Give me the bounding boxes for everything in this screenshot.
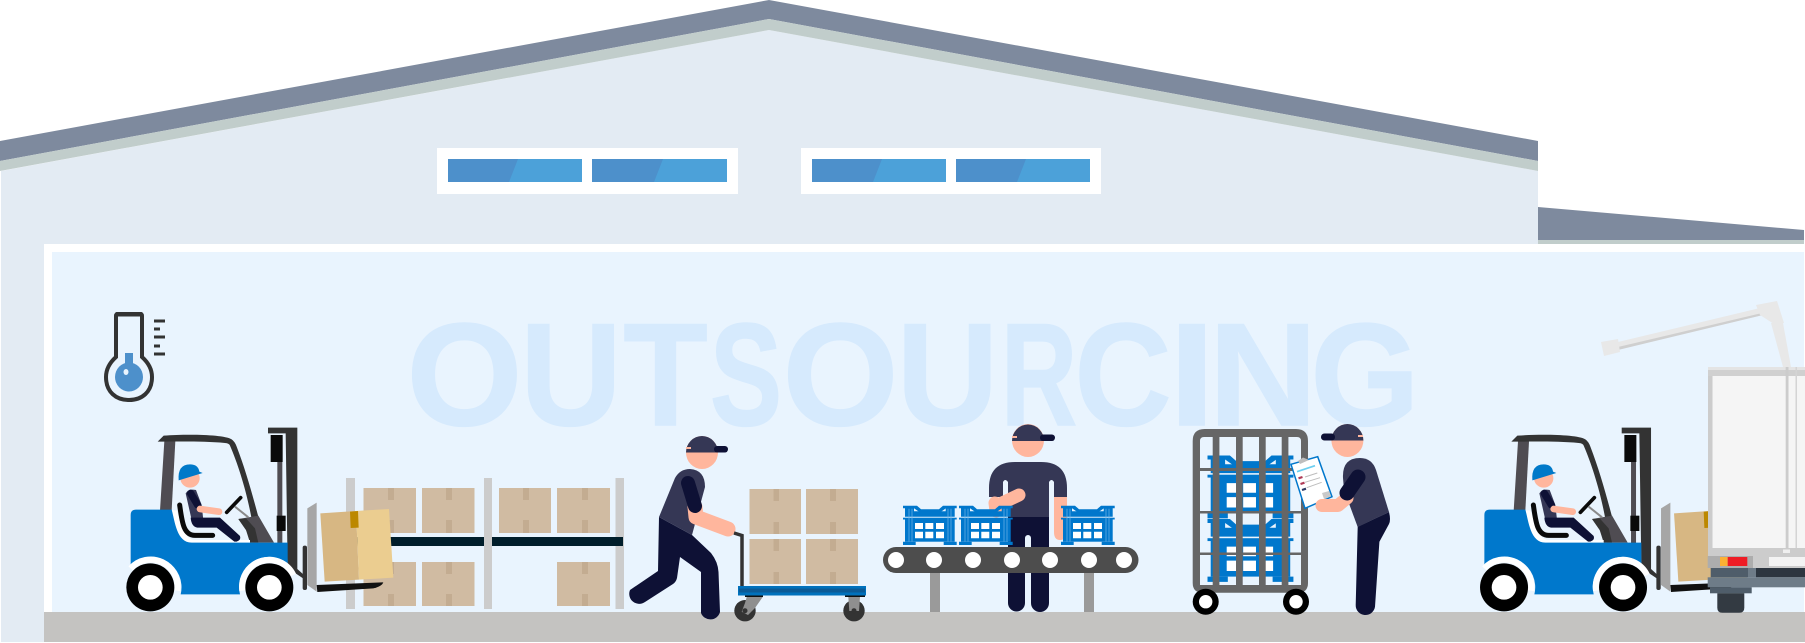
mast [1622,428,1658,579]
clipboard [1291,457,1332,508]
storage rack with boxes [346,478,624,609]
left window [437,148,738,194]
dashboard [1592,516,1628,543]
casters [734,597,865,621]
crate 3 [1061,506,1115,545]
right arm [1054,495,1067,540]
carriage [1656,546,1661,590]
cage frame [1193,429,1308,593]
tail lights [1720,557,1728,566]
arm [695,507,728,529]
torso [1343,458,1389,527]
seat [1533,505,1566,535]
rollers [888,552,1132,568]
conveyor belt [883,547,1138,612]
arm [1322,498,1347,506]
mast [268,428,304,579]
watermark heading: OUTSOURCING: T [623,293,708,457]
forklift right [1480,428,1747,611]
watermark heading: OUTSOURCING: O [407,294,522,457]
head [686,436,728,469]
legs [1356,512,1390,615]
watermark heading: OUTSOURCING: R [1001,294,1077,457]
box tape [388,488,588,606]
torso [989,462,1067,517]
cart platform [738,586,866,596]
door frame [44,244,1804,612]
watermark heading: OUTSOURCING: U [520,294,622,457]
carriage [303,546,307,590]
watermark heading: OUTSOURCING: I [1169,294,1215,457]
watermark heading: OUTSOURCING [407,293,1420,457]
dock arm [1618,308,1763,349]
steering wheel [235,507,248,517]
watermark heading: OUTSOURCING: N [1209,294,1317,457]
right window [801,148,1101,194]
forklift body [131,510,288,594]
cab roof [158,435,258,519]
carried box [320,509,393,582]
interior [52,252,1804,612]
driver [179,464,240,542]
belt [883,547,1138,573]
watermark heading: OUTSOURCING: S [710,294,782,457]
legs [1008,517,1049,612]
conveyor worker [989,424,1067,612]
crate 2 [959,506,1013,545]
hand cart with boxes [734,489,866,621]
caged crate upper [1208,456,1293,518]
truck tire [1717,593,1744,613]
cab roof [1511,435,1612,519]
low side roof [1538,207,1804,240]
delivery truck [1601,301,1805,613]
dashboard [238,516,274,543]
crate 1 [903,506,957,545]
cargo box [1708,367,1805,548]
worker with clipboard [1291,424,1390,615]
watermark heading: OUTSOURCING: U [897,294,998,457]
forklift left [126,428,393,611]
head [1012,424,1055,457]
rear frame [1708,548,1805,568]
roll cage with crates [1193,429,1309,615]
watermark heading: OUTSOURCING: C [1075,293,1171,456]
stored boxes [364,488,610,606]
torso [659,469,705,535]
cage wheels [1193,589,1309,615]
watermark heading: OUTSOURCING: G [1310,293,1420,457]
worker pushing cart [629,436,728,619]
main roof [0,0,1538,161]
head [1321,424,1363,457]
steering wheel [1589,507,1602,517]
roof trim [0,19,1538,171]
wheel arches [131,559,293,591]
icon: thermometer [106,312,165,400]
carried box [1674,509,1747,582]
forklift body [1484,510,1641,594]
rear cab pillar [1514,441,1529,510]
low roof trim [1538,240,1804,244]
cab floor highlight [1525,510,1604,543]
floor [44,612,1805,642]
cab floor highlight [172,510,250,543]
driver [1532,464,1594,542]
rear cab pillar [160,441,175,510]
rack posts [346,478,624,609]
cart boxes [750,489,858,584]
left arm [995,495,1019,511]
legs [629,517,720,619]
seat [180,505,213,535]
cart handle [734,533,742,587]
fork [1670,582,1737,592]
conveyor legs [930,573,940,612]
fork [317,582,383,592]
rack beams [355,537,623,546]
dock arm post [1771,323,1791,367]
watermark heading: OUTSOURCING: O [783,294,898,457]
caged crate lower [1208,519,1293,582]
wheels [1480,563,1647,611]
wheels [126,563,293,611]
chassis [1711,568,1748,577]
wheel arches [1484,559,1647,591]
